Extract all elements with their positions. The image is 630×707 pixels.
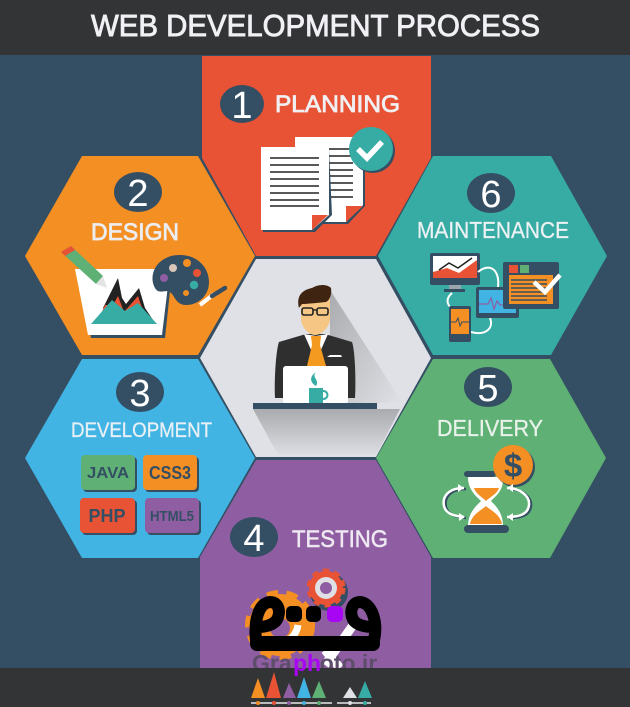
heading: maintenance: MAINTENANCE [417,217,569,243]
tile: java [81,455,137,492]
panel: center person [200,259,431,457]
panel: 2 design [25,156,255,355]
heading: design: DESIGN [91,219,179,246]
number badge 2: 2 [127,173,149,215]
illustration: businessman at laptop [253,285,377,409]
tile: css3 [143,455,199,492]
title: WEB DEVELOPMENT PROCESS [91,8,540,43]
panel: 3 development [25,359,255,558]
desk shadow [253,409,400,455]
watermark accent: ph [293,650,321,676]
icon: hourglass, coin and arrows: $ [504,447,522,484]
header bar [0,0,630,55]
icon: documents with check [261,127,395,232]
tile: php: PHP [88,506,126,526]
heading: delivery: DELIVERY [437,415,543,441]
number badge 5: 5 [477,368,499,410]
number badge 4 [230,517,278,560]
panel: 1 planning [202,56,431,256]
person shadow [330,290,402,403]
number badge 1: 1 [231,85,253,127]
tile: php [80,498,137,535]
number badge 6 [467,173,515,216]
heading: planning: PLANNING [275,91,400,118]
heading: testing: TESTING [292,526,388,553]
tile: html5: HTML5 [150,508,194,525]
number badge 2 [114,172,162,215]
watermark text: Graphoto.ir [252,650,377,676]
footer triangles logo [251,672,372,705]
number badge 6: 6 [480,174,502,216]
tile: html5 [145,498,201,535]
icon: hourglass, coin and arrows [444,445,535,533]
panel: 4 testing [200,460,431,670]
panel: 5 delivery [376,359,606,558]
tile: java: JAVA [87,465,129,482]
number badge 3: 3 [129,373,151,415]
panel: 6 maintenance [378,156,607,355]
number badge 1 [220,85,264,127]
heading: development: DEVELOPMENT [71,419,212,442]
number badge 5 [464,367,512,410]
icon: canvas, pencil and palette [61,246,225,338]
number badge 3 [116,372,164,415]
number badge 4: 4 [243,518,265,560]
icon: devices with sync arrows [430,253,560,342]
footer bar [0,650,630,707]
watermark mark [250,602,380,651]
icon: gears [249,571,358,668]
tile: css3: CSS3 [149,463,191,483]
